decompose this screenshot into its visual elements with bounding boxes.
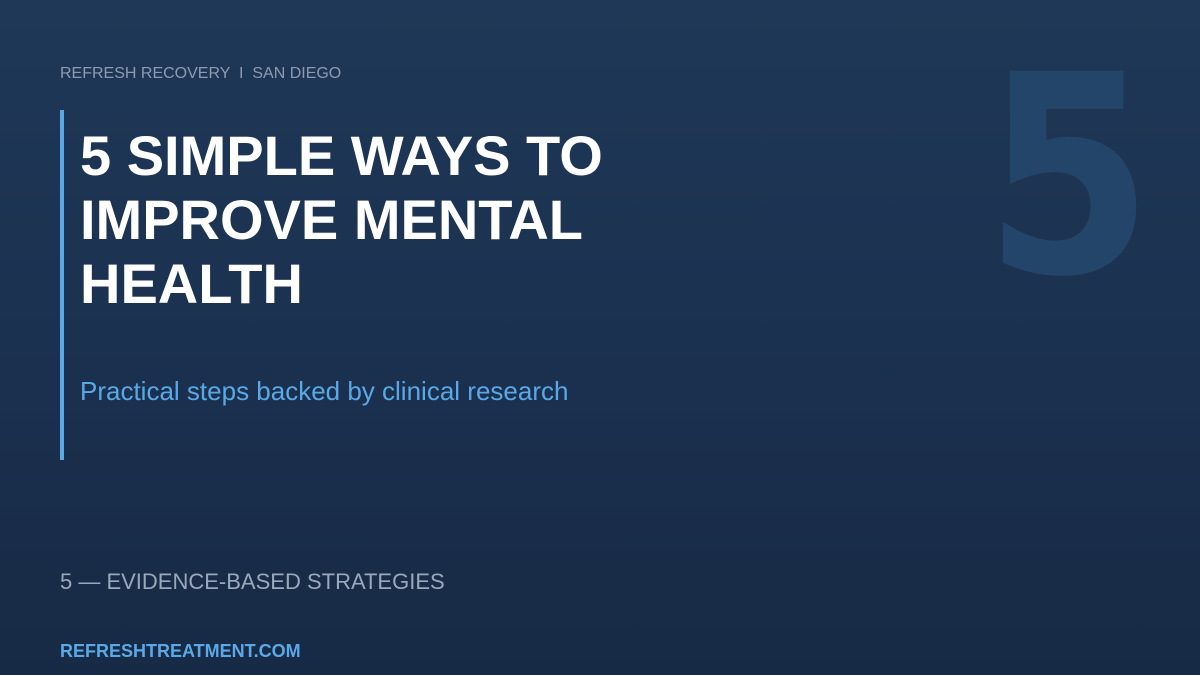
header brand line: REFRESH RECOVERY I SAN DIEGO: [60, 65, 341, 82]
title: 5 SIMPLE WAYS TO: [80, 124, 603, 187]
title: [80, 124, 603, 315]
title: HEALTH: [80, 252, 303, 315]
big decorative number 5: 5: [984, 17, 1153, 338]
title: IMPROVE MENTAL: [80, 188, 583, 251]
accent bar: [60, 110, 64, 460]
subtitle: Practical steps backed by clinical research: [80, 376, 568, 406]
strategies count: 5 — EVIDENCE-BASED STRATEGIES: [60, 569, 445, 594]
website url: REFRESHTREATMENT.COM: [60, 641, 301, 661]
